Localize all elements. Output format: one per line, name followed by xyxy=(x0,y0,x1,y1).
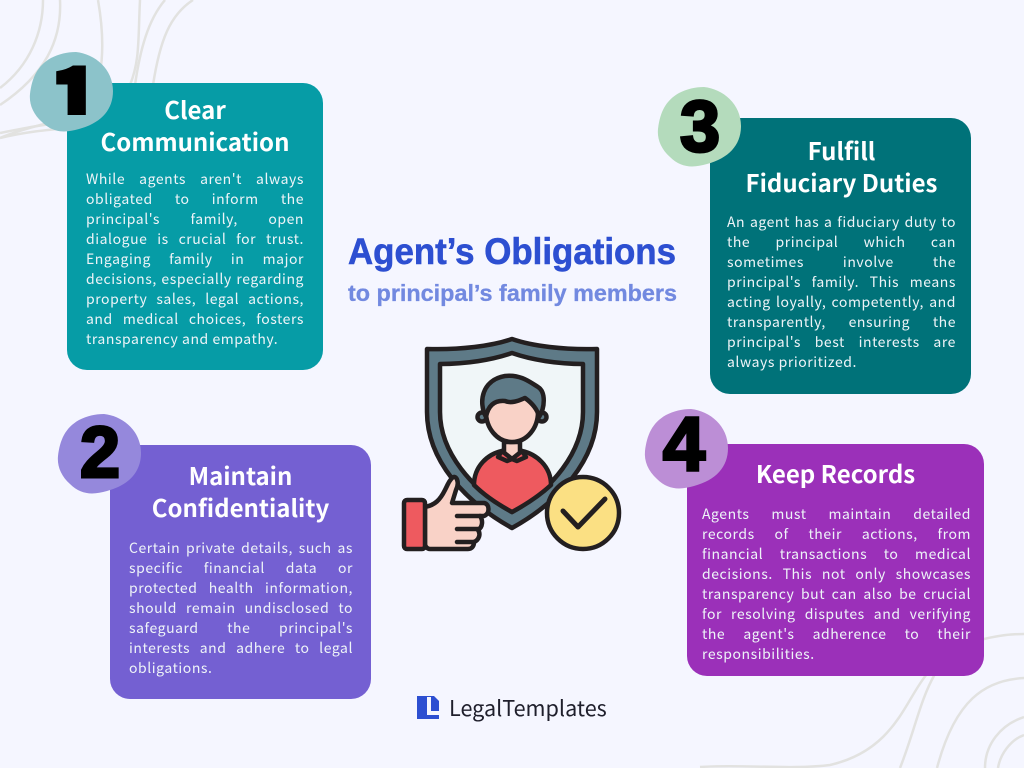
heading: fulfill fiduciary duties: Fulfill xyxy=(808,132,875,167)
text: fulfill fiduciary duties body: the principal which can xyxy=(727,232,956,252)
text: clear communication body xyxy=(86,169,304,349)
text: clear communication body: transparency and empathy. xyxy=(86,329,278,349)
text: clear communication body: principal's family, open xyxy=(86,209,304,229)
logo wordmark: LegalTemplates xyxy=(449,692,607,723)
badge: number 2: 2 xyxy=(80,414,120,493)
text: maintain confidentiality body: Certain private details, such as xyxy=(129,538,353,558)
text: keep records body: transparency but can also be crucial xyxy=(702,584,971,604)
shield xyxy=(427,339,597,528)
heading: maintain confidentiality xyxy=(152,457,329,524)
heading: maintain confidentiality: Maintain xyxy=(189,457,292,492)
text: keep records body: records of their actions, from xyxy=(702,524,971,544)
text: keep records body xyxy=(702,504,971,664)
text: fulfill fiduciary duties body: principal's best interests are xyxy=(727,332,956,352)
panel: maintain confidentiality xyxy=(110,445,371,699)
icon: shield with person, thumbs up and check mark xyxy=(402,336,622,552)
badge: number 2 xyxy=(58,414,141,494)
heading: fulfill fiduciary duties: Fiduciary Duties xyxy=(746,164,937,199)
text: clear communication body: and medical choices, fosters xyxy=(86,309,304,329)
text: clear communication body: dialogue is crucial for trust. xyxy=(86,229,304,249)
panel: clear communication xyxy=(67,83,323,370)
text: fulfill fiduciary duties body: transparently, ensuring the xyxy=(727,312,956,332)
text: maintain confidentiality body: specific financial data or xyxy=(129,558,353,578)
text: keep records body: decisions. This not only showcases xyxy=(702,564,971,584)
text: clear communication body: While agents aren't always xyxy=(86,169,304,189)
text: fulfill fiduciary duties body: sometimes involve the xyxy=(727,252,956,272)
icon: logo mark xyxy=(417,696,439,719)
heading: maintain confidentiality: Confidentiality xyxy=(152,489,329,524)
text: maintain confidentiality body: protected health information, xyxy=(129,578,353,598)
text: clear communication body: property sales, legal actions, xyxy=(86,289,304,309)
text: maintain confidentiality body: should remain undisclosed to xyxy=(129,598,353,618)
text: maintain confidentiality body: interests and adhere to legal xyxy=(129,638,353,658)
text: keep records body: the agent's adherence to their xyxy=(702,624,971,644)
badge: number 1 xyxy=(30,52,113,132)
badge: number 3: 3 xyxy=(680,87,720,167)
text: fulfill fiduciary duties body: always prioritized. xyxy=(727,352,857,372)
heading: clear communication: Communication xyxy=(101,123,289,158)
text: clear communication body: decisions, especially regarding xyxy=(86,269,304,289)
thumbs up xyxy=(404,477,488,549)
heading: clear communication xyxy=(101,91,289,158)
heading: clear communication: Clear xyxy=(164,91,226,126)
text: keep records body: Agents must maintain detailed xyxy=(702,504,971,524)
text: clear communication body: Engaging family in major xyxy=(86,249,304,269)
text: keep records body: financial transactions to medical xyxy=(702,544,971,564)
text: keep records body: for resolving disputes and verifying xyxy=(702,604,971,624)
text: fulfill fiduciary duties body: principal's family. This means xyxy=(727,272,956,292)
text: fulfill fiduciary duties body: acting loyally, competently, and xyxy=(727,292,956,312)
text: maintain confidentiality body xyxy=(129,538,353,678)
text: clear communication body: obligated to inform the xyxy=(86,189,304,209)
badge: number 4 xyxy=(644,409,728,488)
subtitle: to principal’s family members xyxy=(348,280,677,306)
panel: keep records xyxy=(687,444,984,676)
panel: fulfill fiduciary duties xyxy=(710,118,971,394)
text: maintain confidentiality body: obligations. xyxy=(129,658,212,678)
badge: number 3 xyxy=(658,87,741,167)
person xyxy=(474,376,551,512)
heading: fulfill fiduciary duties xyxy=(746,132,937,199)
logo: LegalTemplates xyxy=(417,692,607,723)
text: maintain confidentiality body: safeguard the principal's xyxy=(129,618,353,638)
text: fulfill fiduciary duties body xyxy=(727,212,956,372)
text: keep records body: responsibilities. xyxy=(702,644,815,664)
text: fulfill fiduciary duties body: An agent has a fiduciary duty to xyxy=(727,212,956,232)
heading: keep records: Keep Records xyxy=(756,455,915,490)
check badge xyxy=(547,477,619,549)
